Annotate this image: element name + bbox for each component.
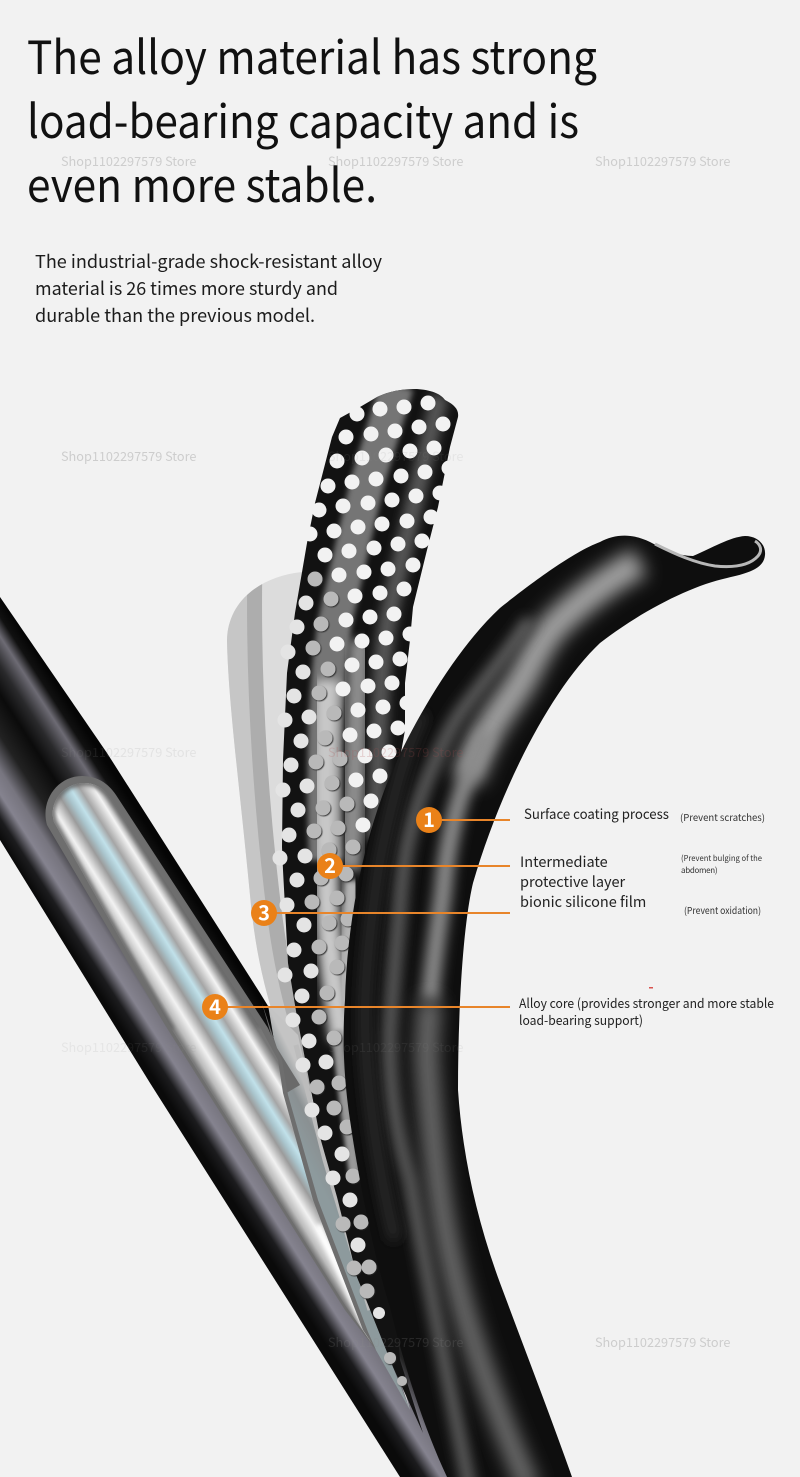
- callout 4: alloy core: Alloy core (provides stronger and more stable: [519, 993, 774, 1012]
- callout 3: silicone film: 3: [258, 897, 270, 926]
- callout 2: intermediate layer: [317, 850, 763, 892]
- watermarks: Shop1102297579 Store: [595, 151, 730, 170]
- perforation holes: over silver interior: [304, 572, 407, 1386]
- watermarks: Shop1102297579 Store: [328, 1037, 463, 1056]
- callout 2: intermediate layer: Intermediate: [520, 851, 608, 872]
- callout 4: alloy core: [202, 991, 774, 1029]
- perforated protective layer: [272, 385, 458, 1433]
- watermarks: Shop1102297579 Store: [328, 446, 463, 465]
- fold of film beside the core: [262, 1003, 410, 1410]
- callout 1: surface coating: [416, 804, 765, 833]
- diagram: layered alloy tube: [0, 385, 765, 1477]
- title: [27, 22, 597, 216]
- callout 1: surface coating: (Prevent scratches): [680, 810, 765, 824]
- silver alloy core: [45, 776, 376, 1350]
- callout 3: silicone film: (Prevent oxidation): [684, 903, 761, 917]
- red mark: [649, 987, 653, 988]
- outer tube body: [0, 597, 480, 1477]
- watermarks: Shop1102297579 Store: [595, 1332, 730, 1351]
- perforation holes: open: [302, 396, 456, 832]
- black surface coating layer: [344, 536, 765, 1477]
- intro paragraph: The industrial-grade shock-resistant alloy: [35, 248, 383, 274]
- intro paragraph: material is 26 times more sturdy and: [35, 275, 338, 301]
- callout 4: alloy core: 4: [209, 991, 221, 1020]
- title: even more stable.: [27, 150, 377, 216]
- callout 2: intermediate layer: protective layer: [520, 871, 626, 892]
- perforation holes: left edge over film: [272, 596, 385, 1319]
- watermarks: Shop1102297579 Store: [61, 742, 196, 761]
- callout 2: intermediate layer: 2: [324, 850, 336, 879]
- watermarks: Shop1102297579 Store: [328, 151, 463, 170]
- watermarks: Shop1102297579 Store: [61, 151, 196, 170]
- callout 4: alloy core: load-bearing support): [519, 1010, 643, 1029]
- callout 2: intermediate layer: (Prevent bulging of the: [681, 853, 763, 864]
- callout 2: intermediate layer: abdomen): [681, 865, 717, 876]
- watermarks: Shop1102297579 Store: [328, 1332, 463, 1351]
- intro paragraph: [35, 248, 383, 328]
- watermarks: Shop1102297579 Store: [61, 1037, 196, 1056]
- title: load-bearing capacity and is: [27, 86, 579, 152]
- silicone film layer: [227, 560, 410, 1410]
- callout 1: surface coating: 1: [423, 804, 435, 833]
- watermarks: Shop1102297579 Store: [61, 446, 196, 465]
- watermarks: Shop1102297579 Store: [328, 742, 463, 761]
- title: The alloy material has strong: [27, 22, 597, 88]
- callout 1: surface coating: Surface coating process: [524, 804, 669, 824]
- callout 3: silicone film: [251, 891, 761, 926]
- curled lip highlight: [655, 541, 761, 567]
- watermarks: [61, 151, 730, 1351]
- intro paragraph: durable than the previous model.: [35, 302, 315, 328]
- callout 3: silicone film: bionic silicone film: [520, 891, 646, 912]
